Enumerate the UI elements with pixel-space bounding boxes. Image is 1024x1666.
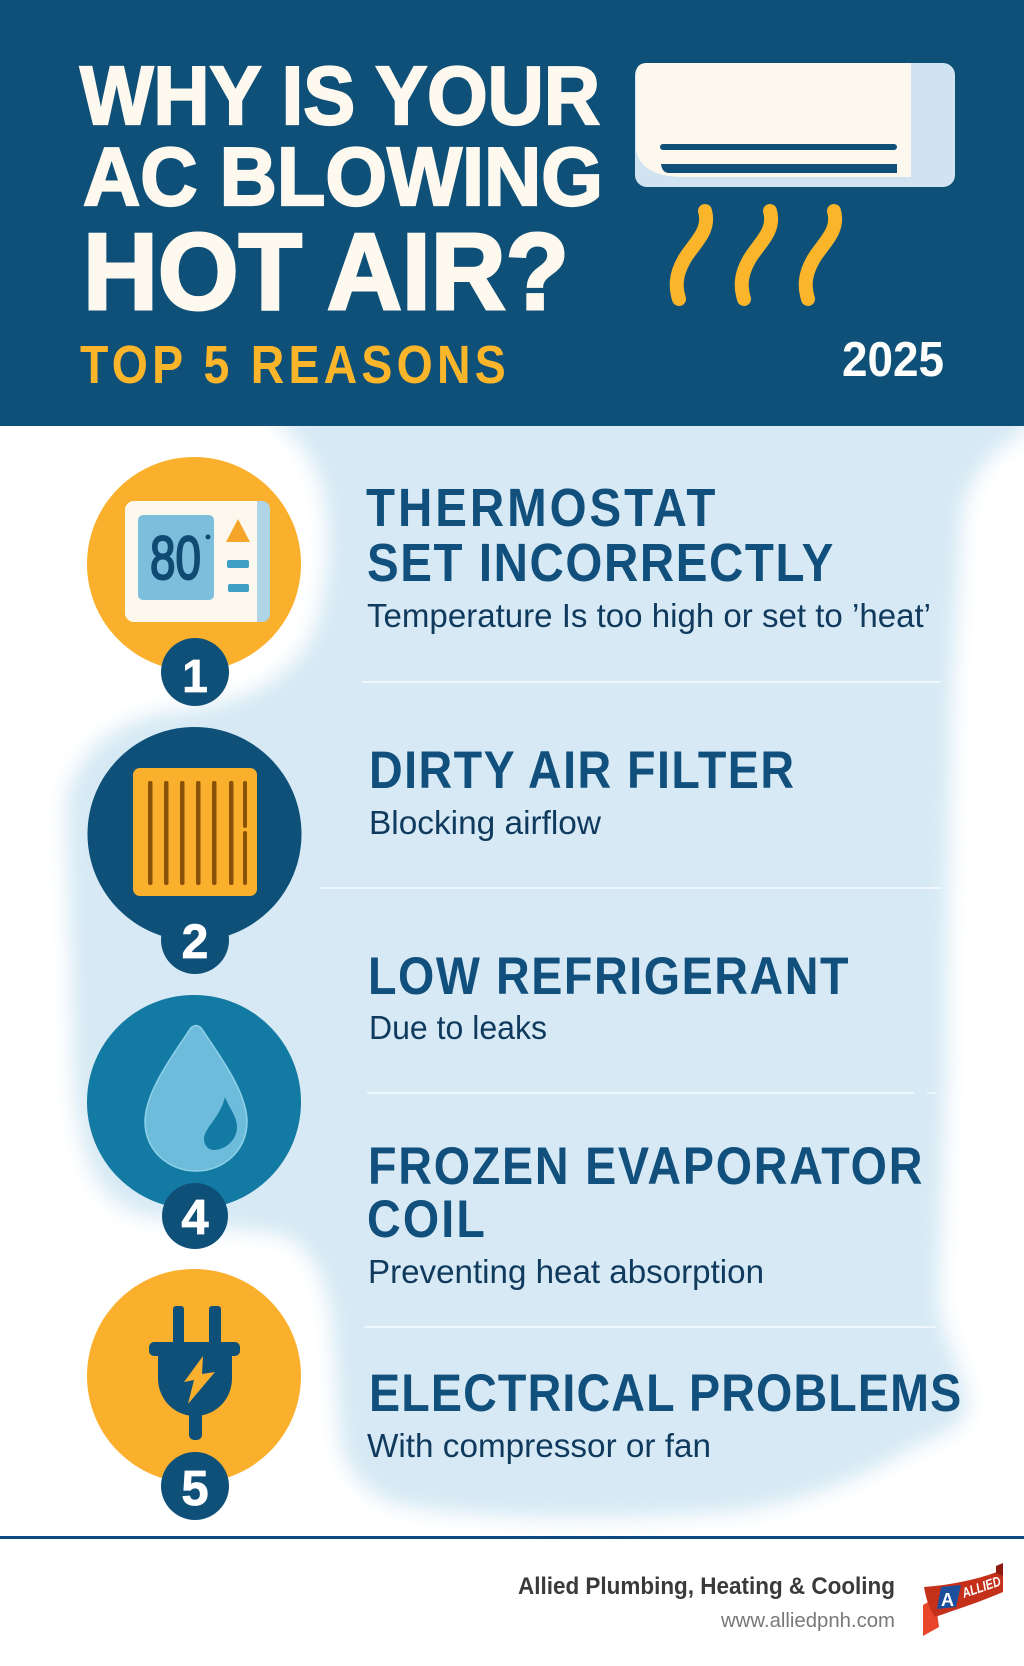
reason 2 text: Blocking airflow: [369, 804, 601, 841]
subtitle: TOP 5 REASONS: [80, 334, 506, 395]
icon: reason 1 thermostat: 80: [150, 524, 201, 592]
reason 3 text: LOW REFRIGERANT: [368, 946, 848, 1006]
logo ribbon: A: [941, 1590, 954, 1610]
icon: reason 2 air filter: [88, 727, 302, 974]
icon: reason 1 thermostat: [87, 457, 301, 706]
title: HOT AIR?: [83, 211, 569, 333]
reason 5 text: [367, 1363, 961, 1464]
icon: air conditioner: [635, 63, 955, 187]
title: WHY IS YOUR: [80, 49, 600, 142]
reason 4 text: COIL: [367, 1189, 485, 1249]
company name: Allied Plumbing, Heating & Cooling: [518, 1573, 895, 1600]
logo ribbon: ALLIED: [959, 1573, 1003, 1601]
icon: hot air waves: [677, 211, 835, 299]
website: www.alliedpnh.com: [720, 1610, 895, 1632]
number badge 4: [162, 1183, 228, 1249]
reason 1 text: THERMOSTAT: [366, 477, 715, 538]
reason 2 text: [369, 740, 794, 841]
number badge 5: [161, 1452, 229, 1520]
reason 4 text: Preventing heat absorption: [368, 1253, 764, 1290]
number badge 1: [161, 638, 229, 706]
reason 5 text: With compressor or fan: [367, 1427, 711, 1464]
background blob: [66, 410, 1024, 1517]
logo ribbon: [923, 1563, 1003, 1636]
number badge 4: 4: [181, 1191, 209, 1245]
footer: [0, 1536, 1024, 1636]
header panel: [0, 0, 1024, 426]
number badge 5: 5: [181, 1462, 209, 1516]
icon: reason 5 electrical plug: [87, 1269, 301, 1520]
reason 1 text: [366, 477, 931, 634]
title: [80, 49, 603, 333]
reason 4 text: FROZEN EVAPORATOR: [368, 1136, 922, 1196]
reason 1 text: Temperature Is too high or set to ’heat’: [367, 597, 931, 634]
number badge 2: 2: [182, 916, 208, 969]
reason 3 text: Due to leaks: [369, 1009, 547, 1046]
reason 3 text: [368, 946, 848, 1046]
year: 2025: [842, 333, 944, 387]
title: AC BLOWING: [83, 130, 603, 223]
number badge 1: 1: [182, 650, 208, 702]
reason 1 text: SET INCORRECTLY: [367, 532, 833, 593]
reason 2 text: DIRTY AIR FILTER: [369, 740, 794, 800]
reason 5 text: ELECTRICAL PROBLEMS: [369, 1363, 961, 1423]
reason 4 text: [367, 1136, 922, 1290]
icon: reason 3 refrigerant drop: [87, 995, 301, 1249]
